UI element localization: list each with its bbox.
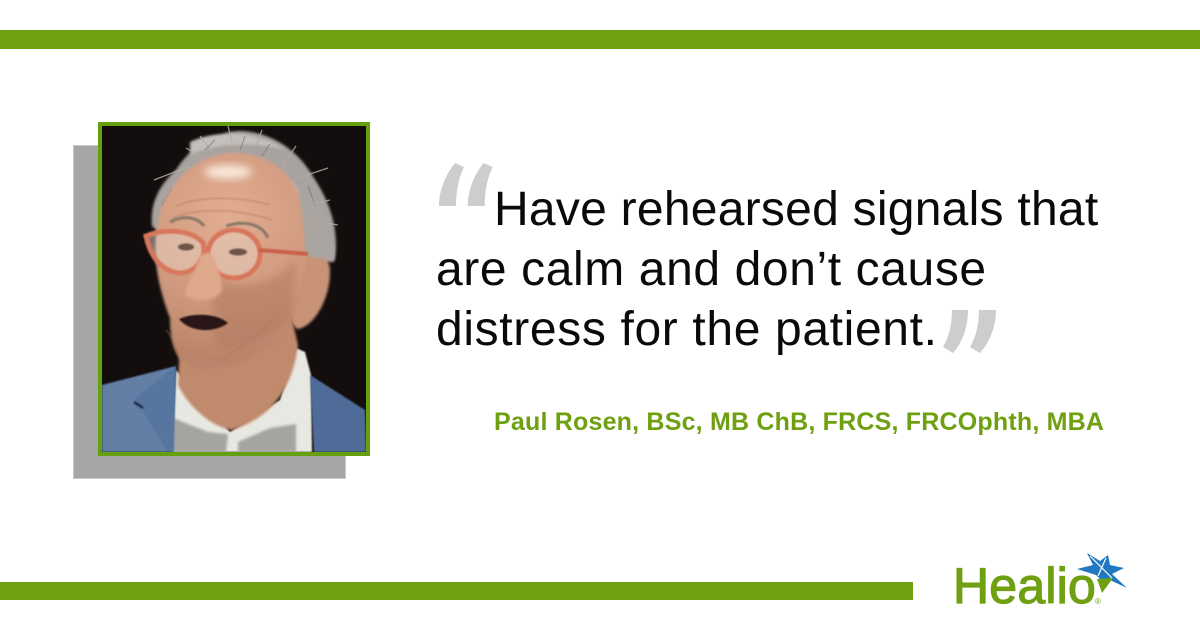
attribution: Paul Rosen, BSc, MB ChB, FRCS, FRCOphth, MBA xyxy=(494,408,1104,436)
portrait photo with green frame xyxy=(98,122,370,456)
hair texture xyxy=(162,136,316,206)
green frame xyxy=(100,124,368,454)
photo background xyxy=(98,122,370,456)
top green bar xyxy=(0,30,1200,49)
mouth xyxy=(179,315,228,330)
gray offset panel behind photo xyxy=(73,145,346,479)
quote text: Have rehearsed signals that xyxy=(494,183,1098,236)
eyes xyxy=(178,244,194,250)
hair flyaways xyxy=(154,126,338,225)
Healio logo xyxy=(953,553,1127,614)
eyebrows xyxy=(170,218,268,238)
quote text xyxy=(436,183,1098,356)
logo wordmark: Healio xyxy=(953,558,1096,614)
shirt stripes collar xyxy=(172,418,228,452)
quote text: distress for the patient. xyxy=(436,303,938,356)
nose xyxy=(186,252,222,300)
quote text: are calm and don’t cause xyxy=(436,243,987,296)
opening quotation mark xyxy=(439,163,492,206)
shirt xyxy=(172,348,312,452)
neck xyxy=(178,310,298,430)
logo star xyxy=(1077,553,1127,593)
glasses xyxy=(146,230,308,278)
ear xyxy=(288,255,330,329)
forehead wrinkles xyxy=(166,198,272,362)
closing quotation mark xyxy=(943,310,996,353)
head xyxy=(155,153,307,369)
shadow on face xyxy=(212,266,295,344)
hair xyxy=(152,131,336,262)
forehead highlight xyxy=(204,165,252,179)
side hair over temple xyxy=(296,180,335,260)
bottom green bar xyxy=(0,582,913,600)
registered mark: ® xyxy=(1095,597,1101,606)
jacket xyxy=(102,366,366,452)
